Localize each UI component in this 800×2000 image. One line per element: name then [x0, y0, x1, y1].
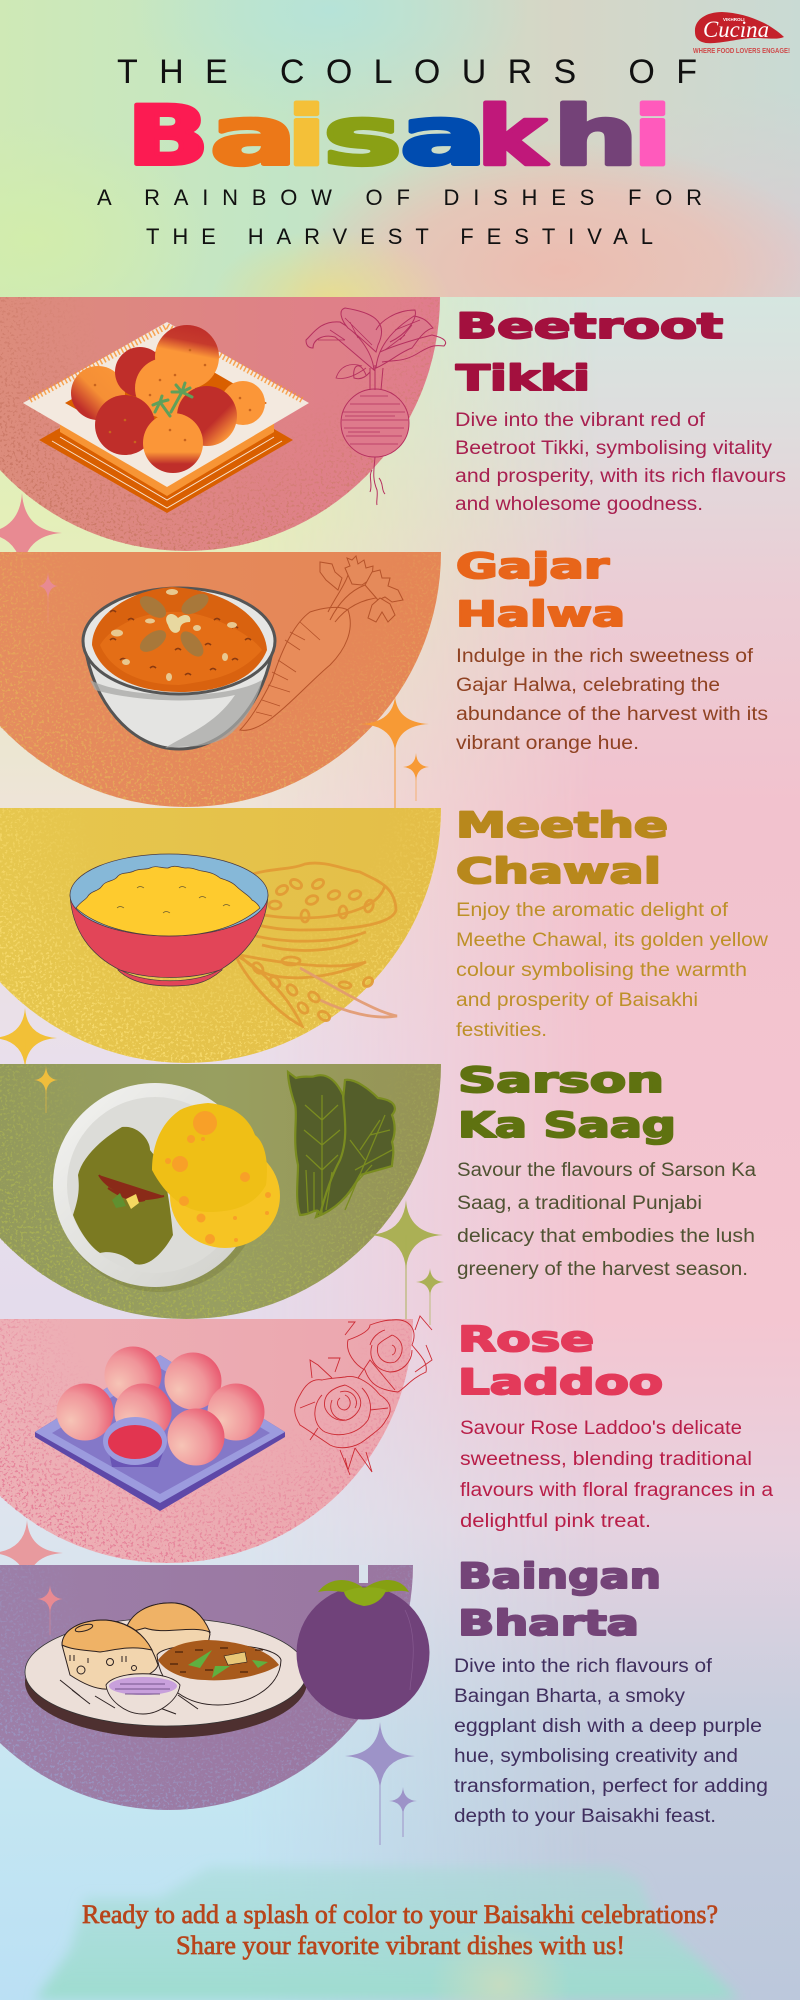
subtitle: THE HARVEST FESTIVAL	[146, 224, 653, 249]
illustration: eggplant	[296, 1565, 430, 1720]
illustration: rice line art	[235, 863, 397, 1026]
illustration: rose line art	[295, 1316, 432, 1475]
sparkle	[0, 493, 62, 633]
heading: Laddoo	[458, 1363, 663, 1403]
semicircle background	[0, 1565, 413, 1810]
heading: Sarson	[458, 1061, 664, 1101]
description: delightful pink treat.	[460, 1511, 651, 1532]
title: Baisakhi: a	[210, 90, 297, 184]
illustration: carrot line art	[240, 556, 403, 730]
heading	[456, 806, 668, 892]
heading: Beetroot	[456, 307, 723, 347]
heading	[458, 1320, 663, 1403]
illustration: halwa bowl	[83, 587, 275, 749]
description: Savour the flavours of Sarson Ka	[457, 1160, 756, 1181]
illustration: beetroot tikki plate	[23, 322, 309, 513]
heading	[458, 1557, 661, 1644]
heading: Meethe	[456, 806, 668, 846]
title: Baisakhi: h	[553, 90, 638, 184]
logo: Vikhroli Cucina: VIKHROLI	[723, 17, 745, 22]
description: delicacy that embodies the lush	[457, 1226, 755, 1247]
heading: Chawal	[456, 852, 661, 892]
sparkle	[0, 1008, 57, 1118]
logo: Vikhroli Cucina: Cucina	[703, 17, 769, 42]
subtitle: A RAINBOW OF DISHES FOR	[97, 185, 702, 210]
description: and wholesome goodness.	[455, 494, 703, 515]
title: Baisakhi: i	[633, 90, 672, 184]
sparkle	[345, 1722, 415, 1845]
footer background blotch	[35, 1867, 740, 2000]
logo: Vikhroli Cucina	[693, 12, 790, 55]
title: The Colours Of: THE COLOURS OF	[117, 53, 697, 91]
title: Baisakhi: a	[400, 90, 487, 184]
sparkle	[403, 753, 429, 801]
description: hue, symbolising creativity and	[454, 1746, 738, 1767]
sparkle	[389, 1787, 417, 1837]
heading: Bharta	[458, 1604, 639, 1644]
illustration: laddoo tray	[35, 1346, 285, 1511]
subtitle	[97, 185, 702, 249]
description: Meethe Chawal, its golden yellow	[456, 930, 768, 951]
description: Saag, a traditional Punjabi	[457, 1193, 702, 1214]
description: depth to your Baisakhi feast.	[454, 1806, 716, 1827]
description	[454, 1656, 768, 1827]
description: vibrant orange hue.	[456, 733, 639, 754]
sparkle	[416, 1268, 444, 1325]
description: Dive into the vibrant red of	[455, 410, 706, 431]
header background	[0, 0, 800, 430]
illustration: beetroot line art	[306, 308, 446, 505]
heading: Baingan	[458, 1557, 661, 1597]
call to action: Share your favorite vibrant dishes with us!	[176, 1931, 625, 1960]
semicircle background	[0, 1064, 441, 1319]
description: Baingan Bharta, a smoky	[454, 1686, 686, 1707]
description: Savour Rose Laddoo's delicate	[460, 1418, 742, 1439]
description: sweetness, blending traditional	[460, 1449, 752, 1470]
sparkle	[361, 696, 429, 810]
illustration: mustard leaves	[288, 1072, 395, 1217]
heading	[456, 547, 625, 635]
panel: Rose Laddoo	[0, 1315, 774, 1810]
title: Baisakhi: s	[323, 90, 402, 184]
description: flavours with floral fragrances in a	[460, 1480, 773, 1501]
sparkle	[34, 1066, 58, 1113]
call to action: Ready to add a splash of color to your Baisakhi celebrations?	[82, 1900, 718, 1929]
heading	[456, 307, 723, 399]
description	[456, 900, 768, 1041]
illustration: rice bowl	[70, 854, 268, 986]
description: Dive into the rich flavours of	[454, 1656, 713, 1677]
description: and prosperity, with its rich flavours	[455, 466, 786, 487]
semicircle background	[0, 1319, 413, 1563]
panel: Baingan Bharta	[0, 1560, 767, 1845]
description: Beetroot Tikki, symbolising vitality	[455, 438, 773, 459]
description: greenery of the harvest season.	[457, 1259, 748, 1280]
sparkle	[37, 1585, 63, 1635]
description: Gajar Halwa, celebrating the	[456, 675, 720, 696]
description: and prosperity of Baisakhi	[456, 990, 698, 1011]
heading: Gajar	[456, 547, 610, 587]
sparkle	[369, 1200, 443, 1332]
heading: Tikki	[456, 359, 590, 399]
description	[460, 1418, 773, 1532]
sparkle	[38, 572, 58, 623]
description: eggplant dish with a deep purple	[454, 1716, 762, 1737]
heading: Halwa	[456, 595, 625, 635]
description: Enjoy the aromatic delight of	[456, 900, 729, 921]
heading: Rose	[458, 1320, 594, 1360]
description: festivities.	[456, 1020, 547, 1041]
description: transformation, perfect for adding	[454, 1776, 768, 1797]
panel: Gajar Halwa	[0, 550, 768, 808]
panel: Beetroot Tikki	[0, 43, 786, 633]
title: Baisakhi: B	[127, 90, 209, 184]
call to action	[82, 1900, 718, 1960]
description: abundance of the harvest with its	[456, 704, 768, 725]
description	[457, 1160, 756, 1280]
title: Baisakhi: i	[287, 90, 326, 184]
sparkle	[0, 1520, 63, 1640]
panel: Sarson Ka Saag	[0, 1064, 756, 1325]
title: Baisakhi: k	[477, 90, 549, 184]
semicircle background	[0, 297, 440, 551]
semicircle background	[0, 552, 441, 807]
semicircle background	[0, 808, 441, 1063]
heading: Ka Saag	[458, 1106, 676, 1146]
description: colour symbolising the warmth	[456, 960, 747, 981]
heading	[458, 1061, 676, 1146]
description	[455, 410, 786, 515]
description	[456, 646, 768, 754]
illustration: saag and makki roti plate	[53, 1083, 280, 1292]
illustration: pav bhaji plate	[25, 1603, 307, 1738]
panel: Meethe Chawal	[0, 808, 768, 1064]
description: Indulge in the rich sweetness of	[456, 646, 754, 667]
